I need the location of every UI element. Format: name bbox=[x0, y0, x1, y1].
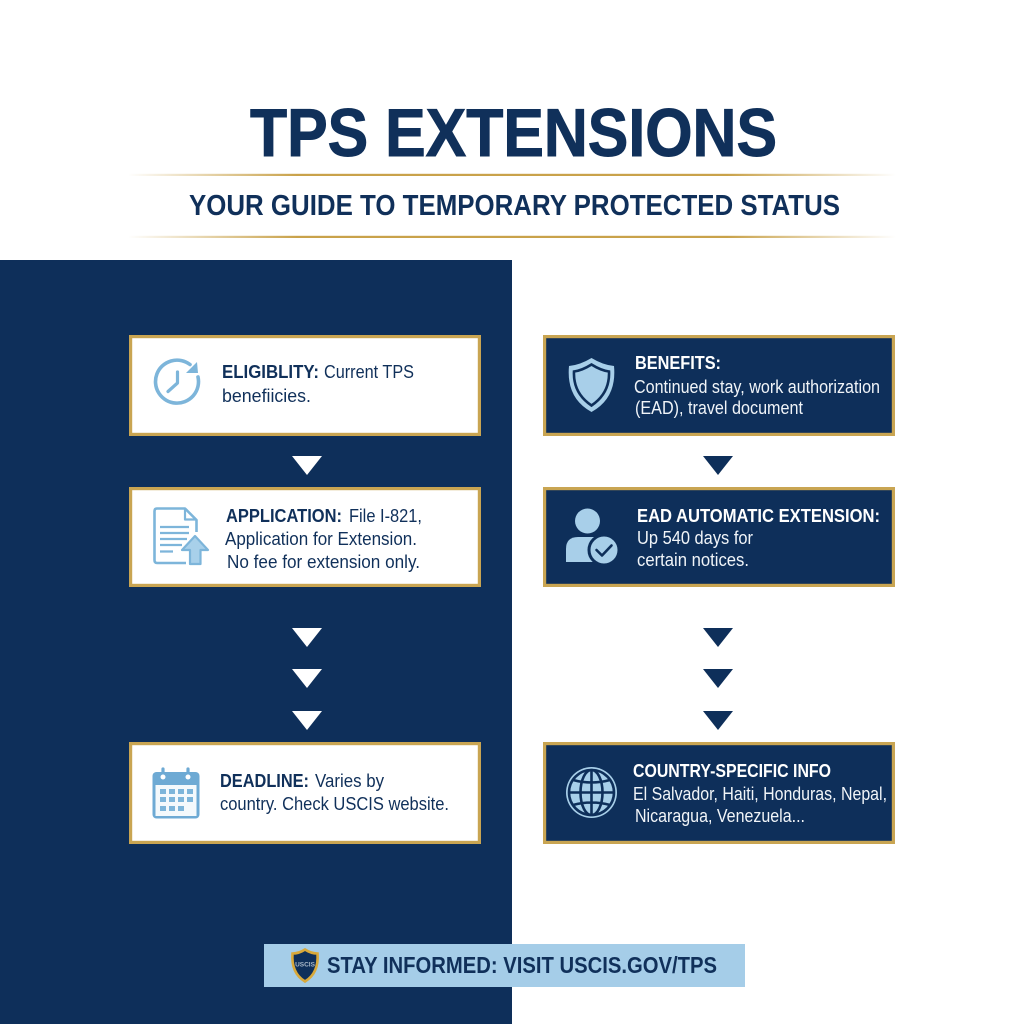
text: benefits: Continued stay, work authorization bbox=[634, 377, 880, 397]
panel: benefits bbox=[545, 337, 893, 434]
text: eligibility bbox=[222, 362, 414, 406]
panel: country-specific info bbox=[545, 744, 893, 842]
callout: stay informed banner bbox=[264, 944, 745, 987]
arrow bbox=[703, 456, 733, 475]
text: banner: STAY INFORMED: VISIT USCIS.GOV/TPS bbox=[327, 952, 717, 978]
panel: application bbox=[131, 489, 479, 585]
icon: clock with refresh arrow bbox=[156, 360, 199, 403]
text: deadline: Varies by bbox=[315, 771, 384, 791]
icon: USCIS shield badge: USCIS bbox=[295, 962, 316, 968]
title: TPS EXTENSIONS bbox=[250, 95, 777, 171]
icon: shield bbox=[569, 358, 614, 412]
icon: person with check bbox=[566, 508, 619, 565]
text: application: File I-821, bbox=[349, 506, 422, 526]
text: deadline: country. Check USCIS website. bbox=[220, 794, 449, 814]
panel: deadline bbox=[131, 744, 479, 842]
icon: USCIS shield badge bbox=[292, 950, 318, 982]
panel: eligibility bbox=[131, 337, 479, 434]
text: EAD bbox=[637, 506, 880, 570]
text: eligibility: benefiicies. bbox=[222, 386, 311, 406]
panel: EAD automatic extension bbox=[545, 489, 893, 585]
arrows bbox=[703, 628, 733, 730]
text: country info bbox=[633, 761, 887, 826]
text: deadline: DEADLINE: bbox=[220, 771, 309, 791]
text: country info: El Salvador, Haiti, Honduras, Nepal, bbox=[633, 784, 887, 804]
text: benefits bbox=[634, 353, 880, 418]
text: benefits: (EAD), travel document bbox=[635, 398, 803, 418]
panel: left navy background bbox=[0, 260, 512, 1024]
arrows bbox=[292, 628, 322, 730]
text: country info: COUNTRY-SPECIFIC INFO bbox=[633, 761, 831, 781]
text: EAD: certain notices. bbox=[637, 550, 749, 570]
subtitle: YOUR GUIDE TO TEMPORARY PROTECTED STATUS bbox=[189, 190, 840, 222]
text: EAD: Up 540 days for bbox=[637, 528, 753, 548]
text: country info: Nicaragua, Venezuela... bbox=[635, 806, 805, 826]
arrow bbox=[292, 456, 322, 475]
text: application bbox=[225, 506, 422, 572]
text: deadline bbox=[220, 771, 449, 814]
icon: globe bbox=[566, 767, 617, 818]
text: application: APPLICATION: bbox=[226, 506, 342, 526]
icon: document with upload arrow bbox=[154, 508, 208, 564]
text: application: No fee for extension only. bbox=[227, 552, 420, 572]
icon: calendar bbox=[152, 769, 200, 818]
text: eligibility: Current TPS bbox=[324, 362, 414, 382]
text: application: Application for Extension. bbox=[225, 529, 417, 549]
text: eligibility: ELIGIBLITY: bbox=[222, 362, 319, 382]
text: benefits: BENEFITS: bbox=[635, 353, 721, 373]
text: EAD: EAD AUTOMATIC EXTENSION: bbox=[637, 506, 880, 526]
